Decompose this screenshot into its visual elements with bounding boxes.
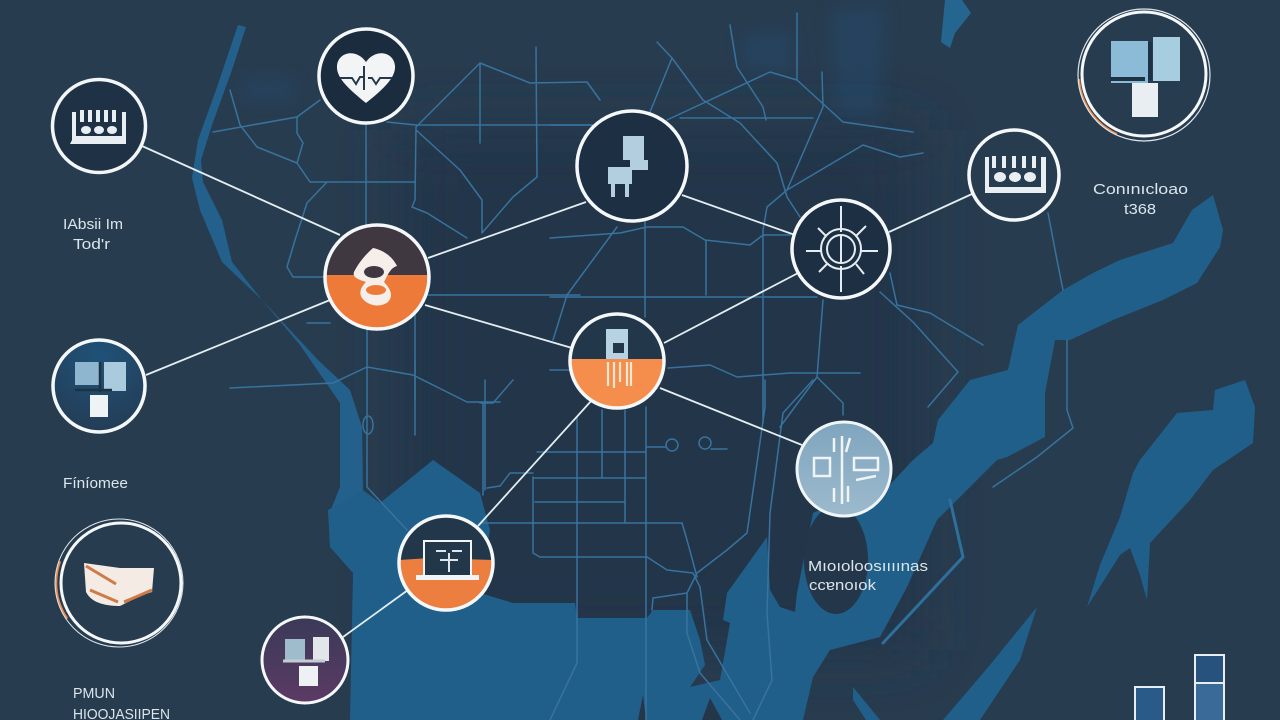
icon: rack bbox=[70, 110, 126, 144]
label: lower left: PMUN bbox=[73, 685, 115, 702]
water: faint top patches bbox=[240, 5, 885, 120]
connector lines bbox=[142, 146, 972, 637]
icon: panels and tag bbox=[1111, 41, 1148, 83]
node: rack right bbox=[969, 130, 1059, 220]
icon: machine bbox=[608, 136, 648, 197]
label: lower right: ccɐnoıok bbox=[809, 577, 877, 594]
label: top left: IAbsii Im bbox=[63, 216, 123, 233]
label: lower right bbox=[808, 558, 928, 594]
node: split circle centre bbox=[570, 314, 664, 409]
label: top left bbox=[63, 216, 123, 253]
icon: panels and tag bbox=[75, 362, 100, 385]
node: central compass bbox=[792, 200, 890, 298]
icon: heart bbox=[337, 53, 395, 103]
label: top left: Tod'r bbox=[73, 236, 110, 253]
water: small lower inlet bbox=[853, 687, 880, 720]
label: top right: t368 bbox=[1124, 201, 1156, 218]
node: laptop bbox=[398, 515, 495, 612]
icon: gear splash bbox=[354, 248, 397, 305]
icon: tower with drips bbox=[606, 329, 628, 359]
icon: split glyph bbox=[814, 436, 878, 504]
icon: laptop bbox=[424, 541, 471, 576]
label: lower right: Mıoıoloosıııınas bbox=[808, 558, 928, 575]
map: road network bbox=[213, 13, 1073, 720]
land: small dark patches in the bay bbox=[638, 675, 772, 720]
bar: short bbox=[1135, 687, 1164, 720]
node: purple bbox=[262, 617, 348, 703]
land: central darker area bbox=[400, 130, 920, 650]
water: upper right lake bbox=[1087, 380, 1255, 607]
icon: panels and tag bbox=[285, 639, 305, 660]
label: lower left bbox=[73, 685, 170, 720]
node: chair central top bbox=[577, 111, 687, 221]
node: large top right bbox=[1078, 9, 1210, 141]
bar chart: lower right bbox=[1135, 655, 1224, 720]
node: pale circle lower right bbox=[797, 422, 891, 516]
node: book bbox=[55, 519, 183, 647]
icon: compass globe bbox=[806, 206, 878, 292]
icon: rack bbox=[985, 156, 1046, 193]
node: network left middle bbox=[53, 340, 145, 432]
node: orange half circle left bbox=[325, 225, 429, 329]
label: top right bbox=[1093, 181, 1188, 218]
water: left river bbox=[192, 25, 363, 517]
bar: tall bbox=[1195, 655, 1224, 720]
node: keyboard top left bbox=[52, 80, 146, 172]
node: heart bbox=[319, 29, 413, 123]
label: top right: Conınıcloao bbox=[1093, 181, 1188, 198]
label: left middle: Fíníomee bbox=[63, 475, 128, 492]
water: bay and main channel bbox=[328, 195, 1223, 720]
water: lower streak bbox=[943, 607, 1037, 720]
water: top right patch bbox=[941, 0, 971, 48]
icon: open book bbox=[84, 563, 154, 606]
land: dark blob under the pale circle bbox=[804, 506, 868, 614]
icon: heart pulse bbox=[340, 66, 392, 90]
